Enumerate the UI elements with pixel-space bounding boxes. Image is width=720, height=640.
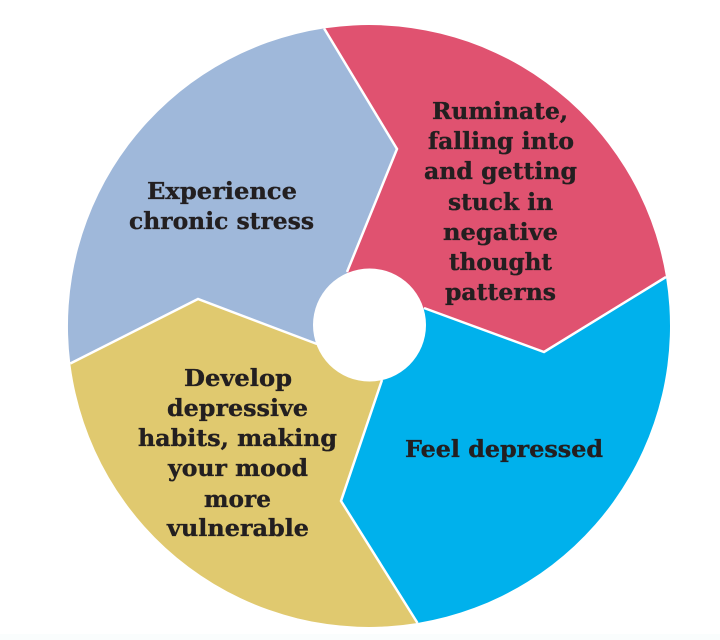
label: develop depressive habits: your mood [167, 455, 308, 482]
label: ruminate: falling into [428, 128, 574, 155]
label: ruminate: negative [443, 219, 558, 246]
label: experience chronic stress: chronic stress [129, 208, 314, 235]
label: develop depressive habits: more [204, 486, 271, 513]
label: ruminate: Ruminate, [432, 98, 568, 125]
panel: ruminate [324, 25, 666, 352]
label: experience chronic stress: Experience [147, 178, 297, 205]
label: develop depressive habits: vulnerable [166, 515, 309, 542]
panel: develop depressive habits [70, 299, 418, 627]
label: develop depressive habits: depressive [167, 395, 308, 422]
label: ruminate: patterns [445, 279, 556, 306]
centre hub [313, 268, 426, 382]
panel: feel depressed [341, 277, 670, 623]
label: develop depressive habits [138, 365, 337, 542]
label: ruminate: and getting [424, 158, 577, 185]
label: ruminate: stuck in [448, 189, 553, 216]
label: feel depressed: Feel depressed [405, 436, 603, 463]
panel: experience chronic stress [68, 28, 397, 364]
label: develop depressive habits: Develop [184, 365, 292, 392]
cycle diagram [68, 25, 670, 627]
label: ruminate [424, 98, 577, 306]
label: experience chronic stress [129, 178, 314, 235]
label: ruminate: thought [449, 249, 552, 276]
label: develop depressive habits: habits, making [138, 425, 337, 452]
